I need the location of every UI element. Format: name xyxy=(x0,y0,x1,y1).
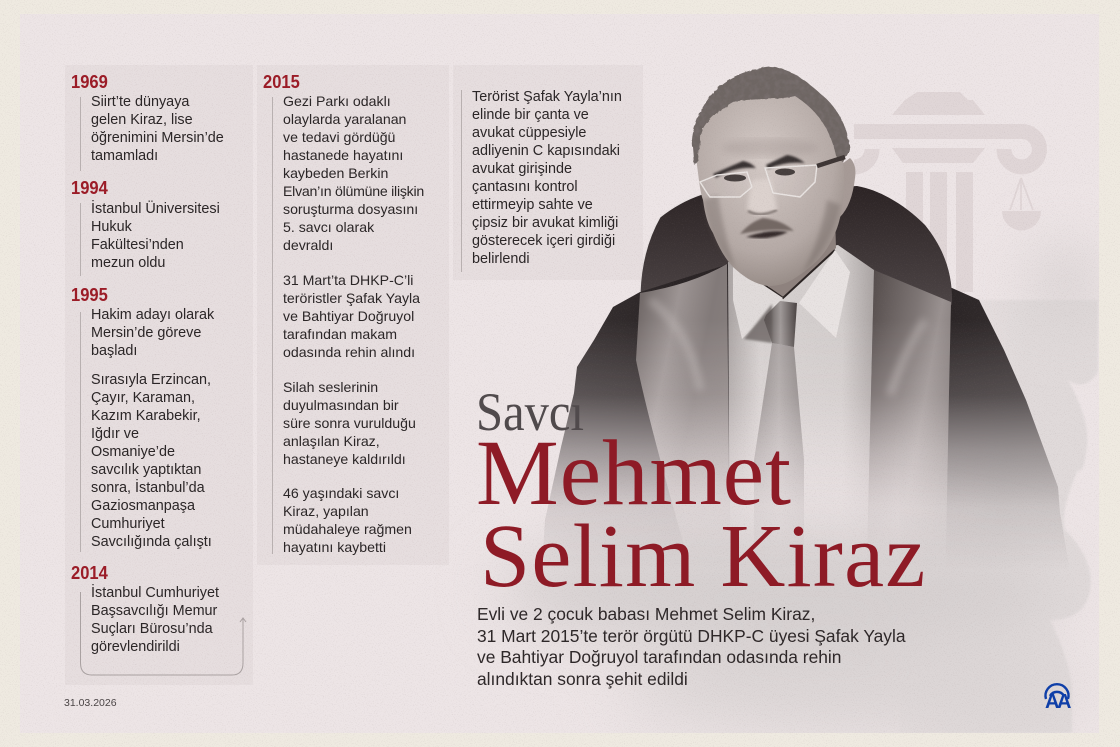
text attack details: elinde bir çanta ve xyxy=(472,107,589,123)
text 1969 xyxy=(91,94,224,164)
subtitle xyxy=(477,604,906,689)
watercolor wash xyxy=(500,247,1098,735)
text 2015 shots: Silah seslerinin xyxy=(283,379,378,395)
ear xyxy=(840,158,856,217)
text 1969: Siirt’te dünyaya xyxy=(91,94,189,110)
text 2015 death: müdahaleye rağmen xyxy=(283,521,412,537)
text attack details: ettirmeyip sahte ve xyxy=(472,197,593,213)
text 2015 hostage: odasında rehin alındı xyxy=(283,344,415,360)
text attack details: çipsiz bir avukat kimliği xyxy=(472,215,618,231)
eyes xyxy=(724,174,746,182)
text 2015 Gezi xyxy=(283,93,424,253)
text 2015 death: Kiraz, yapılan xyxy=(283,503,369,519)
text 1995 career: sonra, İstanbul’da xyxy=(91,480,205,496)
text 1995 career: Gaziosmanpaşa xyxy=(91,498,195,514)
text 1994: Hukuk xyxy=(91,219,132,235)
year 2014: 2014 xyxy=(71,562,108,583)
moustache xyxy=(740,218,794,234)
glasses xyxy=(700,165,817,197)
text 1995 career: Savcılığında çalıştı xyxy=(91,534,212,550)
neck xyxy=(768,232,836,297)
text 2015 Gezi: devraldı xyxy=(283,237,333,253)
panel: timeline column 1 xyxy=(65,65,253,685)
year 1969: 1969 xyxy=(71,71,108,92)
text attack details xyxy=(472,89,622,267)
panel: attack details xyxy=(453,65,643,280)
text 2015 Gezi: olaylarda yaralanan xyxy=(283,111,406,127)
left collar xyxy=(733,265,783,339)
title: Savcı: Savcı xyxy=(476,382,584,442)
brows xyxy=(713,161,756,178)
text attack details: avukat cüppesiyle xyxy=(472,125,586,141)
text 2015 death: 46 yaşındaki savcı xyxy=(283,485,399,501)
text 2015 Gezi: ve tedavi gördüğü xyxy=(283,129,395,145)
lapel sheen xyxy=(650,300,925,395)
text attack details: çantasını kontrol xyxy=(472,179,578,195)
text 2015 hostage: ve Bahtiyar Doğruyol xyxy=(283,308,414,324)
year 1994: 1994 xyxy=(71,177,108,198)
robe xyxy=(544,264,1066,548)
text attack details: belirlendi xyxy=(472,251,530,267)
text 2015 death: hayatını kaybetti xyxy=(283,539,386,555)
text 2014: görevlendirildi xyxy=(91,639,180,655)
subtitle: Evli ve 2 çocuk babası Mehmet Selim Kiraz, xyxy=(477,604,815,624)
left lapel xyxy=(636,264,729,526)
text 1995 career xyxy=(91,372,212,550)
text attack details: Terörist Şafak Yayla’nın xyxy=(472,89,622,105)
text 2015 Gezi: soruşturma dosyasını xyxy=(283,201,418,217)
text attack details: adliyenin C kapısındaki xyxy=(472,143,620,159)
text 2015 Gezi: Gezi Parkı odaklı xyxy=(283,93,391,109)
text 2015 Gezi: hastanede hayatını xyxy=(283,147,403,163)
text 2014: Suçları Bürosu’nda xyxy=(91,621,213,637)
chair xyxy=(640,186,952,305)
text 1969: gelen Kiraz, lise xyxy=(91,112,193,128)
text 2015 shots: süre sonra vurulduğu xyxy=(283,415,416,431)
year 2015: 2015 xyxy=(263,71,300,92)
portrait xyxy=(544,66,1066,548)
text 2015 Gezi: kaybeden Berkin xyxy=(283,165,388,181)
tie knot xyxy=(764,300,797,347)
hair xyxy=(692,67,850,165)
nose xyxy=(747,178,777,215)
text 1994 xyxy=(91,200,220,271)
text 1995: başladı xyxy=(91,343,137,359)
text 2015 hostage: teröristler Şafak Yayla xyxy=(283,290,420,306)
text 1969: tamamladı xyxy=(91,148,158,164)
forehead shadow xyxy=(722,139,818,157)
text 1995 career: Osmaniye’de xyxy=(91,444,175,460)
text 2015 Gezi: Elvan’ın ölümüne ilişkin xyxy=(283,183,424,199)
text 1995 career: Kazım Karabekir, xyxy=(91,408,201,424)
text attack details: gösterecek içeri girdiği xyxy=(472,233,615,249)
text 1995 career: Cumhuriyet xyxy=(91,516,165,532)
text 1994: İstanbul Üniversitesi xyxy=(91,201,220,217)
text 2015 death xyxy=(283,485,412,555)
text 1994: Fakültesi’nden xyxy=(91,237,184,253)
text 2015 hostage xyxy=(283,272,420,360)
text 1969: öğrenimini Mersin’de xyxy=(91,130,224,146)
text 2015 hostage: tarafından makam xyxy=(283,326,397,342)
panel: timeline column 2 xyxy=(257,65,449,565)
text 2015 shots: duyulmasından bir xyxy=(283,397,399,413)
tie body xyxy=(754,343,804,520)
face xyxy=(697,90,844,286)
text 1995 career: savcılık yaptıktan xyxy=(91,462,201,478)
right collar xyxy=(799,250,850,338)
shirt xyxy=(728,245,874,546)
right lapel xyxy=(868,270,951,532)
text 2015 shots: hastaneye kaldırıldı xyxy=(283,451,406,467)
text 1995 career: Sırasıyla Erzincan, xyxy=(91,372,211,388)
year 1995: 1995 xyxy=(71,284,108,305)
date: 31.03.2026 xyxy=(64,697,117,709)
text 1995: Hakim adayı olarak xyxy=(91,307,214,323)
timeline rules xyxy=(80,97,81,171)
text 1995: Mersin’de göreve xyxy=(91,325,201,341)
text 1994: mezun oldu xyxy=(91,255,165,271)
text 2014: İstanbul Cumhuriyet xyxy=(91,585,219,601)
text 1995 xyxy=(91,307,214,359)
text 2014: Başsavcılığı Memur xyxy=(91,603,217,619)
text 2015 shots xyxy=(283,379,416,467)
text 2015 hostage: 31 Mart’ta DHKP-C’li xyxy=(283,272,413,288)
title: Mehmet: Mehmet xyxy=(476,422,792,525)
text 2015 Gezi: 5. savcı olarak xyxy=(283,219,374,235)
icon: justice column with scales xyxy=(854,92,1041,292)
arrow: timeline end xyxy=(80,592,246,676)
icon: AA logo xyxy=(1044,683,1071,710)
mouth xyxy=(746,231,788,238)
title: Selim Kiraz: Selim Kiraz xyxy=(480,507,927,606)
text attack details: avukat girişinde xyxy=(472,161,572,177)
text 2014 xyxy=(91,584,219,655)
text 2015 shots: anlaşılan Kiraz, xyxy=(283,433,380,449)
text 1995 career: Iğdır ve xyxy=(91,426,139,442)
subtitle: 31 Mart 2015’te terör örgütü DHKP-C üyesi Şafak Yayla xyxy=(477,626,906,646)
collar shadow xyxy=(744,304,772,343)
text 1995 career: Çayır, Karaman, xyxy=(91,390,195,406)
subtitle: ve Bahtiyar Doğruyol tarafından odasında rehin xyxy=(477,647,841,667)
cheek shade xyxy=(703,195,840,274)
subtitle: alındıktan sonra şehit edildi xyxy=(477,669,688,689)
